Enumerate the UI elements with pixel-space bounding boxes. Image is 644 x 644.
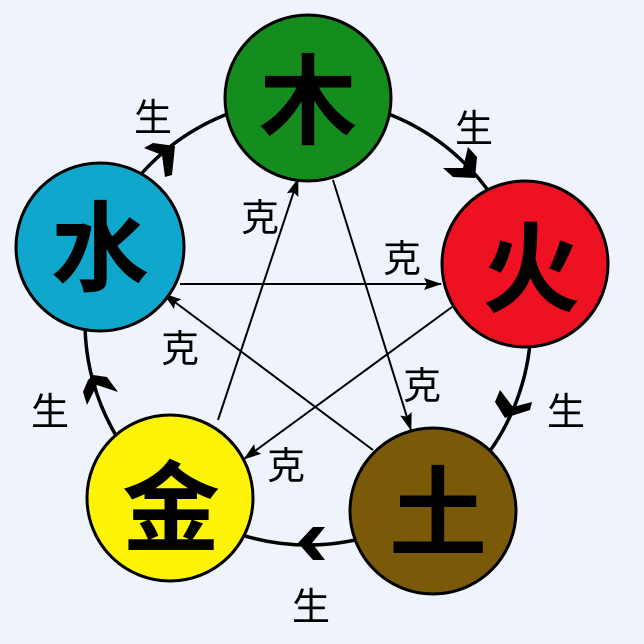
arrow: metal to water: [83, 375, 118, 405]
label: controls, fire to metal: 克: [267, 446, 305, 488]
control line: fire to metal: [244, 307, 452, 459]
label: generates, fire to earth: 生: [547, 392, 585, 434]
label: controls, water to fire: 克: [383, 239, 421, 281]
node: metal: 金: [122, 454, 220, 564]
generation cycle ring: [85, 99, 531, 545]
node: fire: [442, 181, 608, 347]
control line: water to fire: [180, 283, 441, 285]
arrow: wood to fire: [443, 147, 477, 178]
arrow: earth to metal: [298, 527, 325, 560]
label: controls, metal to wood: 克: [241, 198, 279, 240]
node: earth: 土: [389, 459, 487, 569]
arrow: water to wood: [144, 143, 175, 177]
label: generates, water to wood: 生: [134, 98, 172, 140]
node: wood: 木: [259, 47, 357, 157]
label: generates, metal to water: 生: [31, 392, 69, 434]
label: controls, earth to water: 克: [161, 329, 199, 371]
node: water: 水: [51, 194, 149, 304]
control line: wood to earth: [333, 180, 411, 430]
label: generates, wood to fire: 生: [455, 109, 493, 151]
node: earth: [350, 428, 516, 594]
node: wood: [225, 15, 391, 181]
control line: earth to water: [164, 294, 373, 450]
label: generates, earth to metal: 生: [292, 587, 330, 629]
node: fire: 火: [482, 215, 580, 325]
node: metal: [87, 415, 253, 581]
arrow: fire to earth: [495, 390, 532, 418]
control line: metal to wood: [218, 179, 298, 420]
label: controls, wood to earth: 克: [403, 366, 441, 408]
node: water: [16, 163, 184, 331]
